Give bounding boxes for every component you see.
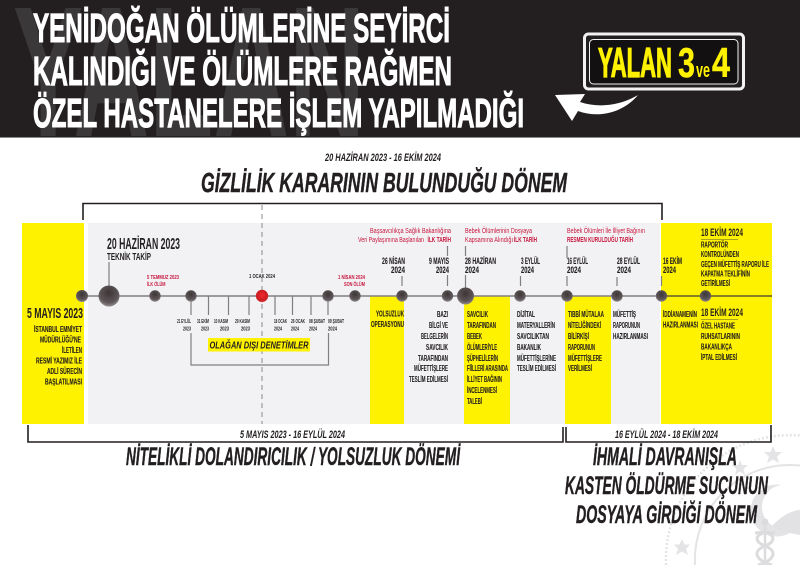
timeline dots (76, 286, 711, 306)
event: belgelerin teslimi: TARAFINDAN (418, 354, 448, 363)
date labels: 2024 (465, 265, 479, 275)
audit date labels: 2023 (183, 326, 191, 332)
red notes: first dates: Veri Paylaşımına Başlanılan (358, 237, 424, 244)
red notes: first dates: Başsavcılıkça Sağlık Bakanlığına (370, 228, 451, 235)
event: bilirkişi raporu: MÜFETTİŞLERE (568, 354, 602, 363)
red notes: first dates: Bebek Ölümlerinin Dosyaya (465, 227, 532, 235)
event: 18 ekim ruhsat iptali: ÖZEL HASTANE (701, 322, 735, 330)
event: teknik takip: TEKNİK TAKİP (107, 250, 151, 263)
date labels: 3 EYLÜL (521, 256, 540, 266)
event: iddianame: HAZIRLANMASI (663, 320, 698, 330)
audit date labels: 21 EYLÜL (177, 318, 191, 325)
date labels: 2024 (521, 265, 534, 275)
badge: yalan 3 ve 4: 3 (678, 39, 695, 86)
event: illiyet bağı talebi: FİİLLERİ ARASINDA (467, 364, 508, 373)
event: 5 mayıs 2023: İLETİLEN (62, 346, 82, 355)
main title: YENİDOĞAN ÖLÜMLERİNE SEYİRCİ (33, 5, 450, 51)
event: 5 mayıs 2023: MÜDÜRLÜĞÜ'NE (40, 336, 81, 344)
heading: fraud period (126, 428, 461, 471)
event: 5 mayıs 2023: RESMİ YAZIMIZ İLE (36, 356, 82, 366)
audit date labels: 2023 (220, 326, 229, 332)
event: iddianame: İDDİANAMENİN (663, 310, 697, 319)
event: bilirkişi raporu: NİTELİĞİNDEKİ (568, 321, 601, 330)
badge: yalan 3 ve 4: ve (696, 60, 710, 82)
secrecy period heading: 20 HAZİRAN 2023 - 16 EKİM 2024 (324, 151, 441, 164)
event: belgelerin teslimi: MÜFETTİŞLERE (414, 364, 448, 373)
event: bilirkişi raporu: VERİLMESİ (568, 364, 592, 373)
event: 18 ekim kapatma teklifi: GETİRİLMESİ (701, 279, 730, 288)
bracket: negligence period (566, 425, 771, 442)
event: 18 ekim ruhsat iptali: BAKANLIKÇA (701, 342, 732, 352)
audit date labels: 2024 (328, 326, 337, 332)
event: 18 ekim kapatma teklifi: KAPATMA TEKLİFİNİN (701, 270, 750, 278)
event: 18 ekim ruhsat iptali: RUHSATLARININ (701, 332, 740, 341)
audit date labels (177, 318, 345, 332)
event: illiyet bağı talebi: İNCELENMESİ (467, 386, 497, 395)
audit date labels: 29 KASIM (235, 319, 250, 325)
red notes: first dates: İLK TARİH (428, 236, 451, 244)
main title: KALINDIĞI VE ÖLÜMLERE RAĞMEN (33, 48, 452, 94)
event: dijital materyaller: BAKANLIK (517, 343, 541, 352)
audit date labels: 2024 (274, 326, 282, 332)
event: belgelerin teslimi: BAZI (437, 310, 448, 319)
date labels: 2024 (567, 265, 581, 275)
date labels: 16 EYLÜL (567, 256, 588, 266)
heading: negligence period: 16 EYLÜL 2024 - 18 EKİM 2024 (615, 428, 718, 441)
date labels: 26 NİSAN (382, 256, 405, 266)
event: 18 ekim ruhsat iptali: 18 EKİM 2024 (701, 306, 744, 319)
event: 18 ekim kapatma teklifi: KONTROLÜNDEN (701, 250, 739, 259)
date labels: 9 MAYIS (429, 256, 449, 266)
event: illiyet bağı talebi: İLLİYET BAĞININ (467, 375, 502, 384)
red notes: first dates: Kapsamına Alındığı (465, 237, 513, 244)
event: bilirkişi raporu: TIBBİ MÜTALAA (568, 310, 604, 319)
heading: negligence period (565, 428, 769, 529)
event: yolsuzluk operasyonu (371, 310, 404, 329)
date labels: 2024 (436, 265, 449, 275)
audit date labels: 10 KASIM (214, 319, 228, 325)
red notes: first dates (358, 226, 645, 244)
event: illiyet bağı talebi: TARAFINDAN (467, 321, 496, 330)
heading: fraud period: 5 MAYIS 2023 - 16 EYLÜL 2024 (240, 428, 345, 441)
event: 5 mayıs 2023 (27, 305, 83, 386)
callout: olağan dışı denetimler: OLAĞAN DIŞI DENETİMLER (210, 338, 309, 352)
audit date labels: 2024 (291, 326, 299, 332)
event: illiyet bağı talebi: ÖLÜMLERİYLE (467, 343, 497, 352)
audit date labels: 08 ŞUBAT (309, 319, 326, 325)
event: dijital materyaller (517, 310, 556, 373)
event: dijital materyaller: SAVCILIKTAN (517, 332, 549, 341)
event: illiyet bağı talebi: TALEBİ (467, 397, 482, 406)
event: yolsuzluk operasyonu: YOLSUZLUK (376, 310, 404, 318)
event: 5 mayıs 2023: ADLİ SÜRECİN (47, 367, 82, 376)
header band (0, 0, 800, 176)
event: müfettiş raporu: MÜFETTİŞ (613, 310, 636, 319)
bracket: secrecy period (83, 204, 662, 220)
event: bilirkişi raporu (568, 310, 604, 373)
event: 18 ekim ruhsat iptali: İPTAL EDİLMESİ (701, 353, 737, 362)
red notes: first dates: RESMEN KURULDUĞU TARİH (567, 235, 633, 244)
audit date labels: 2023 (201, 326, 209, 332)
emblem watermark (666, 435, 800, 565)
date labels: 28 EYLÜL (617, 256, 640, 266)
heading: fraud period: NİTELİKLİ DOLANDIRICILIK / YOLSUZLUK DÖNEMİ (126, 442, 461, 471)
panel backgrounds (22, 223, 772, 424)
event: dijital materyaller: DİJİTAL (517, 310, 535, 319)
event: illiyet bağı talebi: SAVCILIK (467, 310, 488, 319)
event: dijital materyaller: TESLİM EDİLMESİ (517, 364, 556, 373)
event: belgelerin teslimi: BELGELERİN (421, 332, 448, 341)
event: 5 mayıs 2023: BAŞLATILMASI (45, 378, 82, 386)
event: 5 mayıs 2023: İSTANBUL EMNİYET (34, 325, 82, 334)
event: first and last death, new year: İLK ÖLÜM (147, 281, 166, 288)
main title (33, 5, 524, 136)
event: bilirkişi raporu: RAPORUNUN (568, 343, 595, 352)
bracket: fraud period (28, 425, 563, 442)
event: illiyet bağı talebi (467, 310, 508, 406)
event: illiyet bağı talebi: ŞÜPHELİLERİN (467, 354, 498, 363)
event: belgelerin teslimi: SAVCILIK (426, 343, 448, 352)
date labels: 2024 (663, 265, 676, 275)
audit date labels: 09 ŞUBAT (328, 319, 345, 325)
date labels (382, 256, 682, 275)
event: müfettiş raporu (613, 310, 648, 341)
event: bilirkişi raporu: BİLİRKİŞİ (568, 332, 589, 341)
event: müfettiş raporu: RAPORUNUN (613, 321, 640, 330)
event: yolsuzluk operasyonu: OPERASYONU (371, 320, 404, 329)
secrecy period heading (201, 151, 567, 198)
event: dijital materyaller: MÜFETTİŞLERİNE (517, 354, 556, 363)
event: 5 mayıs 2023: 5 MAYIS 2023 (27, 305, 83, 322)
event: belgelerin teslimi: TESLİM EDİLMESİ (409, 375, 448, 384)
event: first and last death, new year: 5 TEMMUZ 2023 (147, 275, 180, 281)
date labels: 2024 (391, 265, 405, 275)
audit date labels: 18 OCAK (274, 319, 287, 325)
event: first and last death, new year (147, 274, 366, 288)
event: first and last death, new year: 1 OCAK 2024 (249, 274, 276, 280)
red notes: first dates: Bebek Ölümleri İle İlliyet Bağının (567, 226, 645, 235)
event: 18 ekim kapatma teklifi (701, 226, 769, 288)
audit date labels: 2024 (309, 326, 317, 332)
timeline axis and ticks (82, 246, 772, 365)
event: first and last death, new year: 1 NİSAN 2024 (338, 274, 366, 281)
event: dijital materyaller: MATERYALLERİN (517, 321, 555, 330)
event: iddianame (663, 310, 698, 330)
date labels: 16 EKİM (663, 256, 682, 266)
audit date labels: 31 EKİM (197, 318, 209, 325)
badge: yalan 3 ve 4: 4 (712, 39, 730, 86)
event: müfettiş raporu: HAZIRLANMASI (613, 332, 648, 341)
secrecy period heading: GİZLİLİK KARARININ BULUNDUĞU DÖNEM (201, 167, 567, 198)
event: belgelerin teslimi: BİLGİ VE (429, 321, 448, 330)
audit date labels: 26 OCAK (291, 319, 305, 325)
date labels: 2024 (617, 265, 631, 275)
red notes: first dates: İLK TARİH (514, 236, 537, 244)
event: 18 ekim kapatma teklifi: 18 EKİM 2024 (701, 226, 744, 239)
date labels: 28 HAZİRAN (465, 256, 496, 266)
event: illiyet bağı talebi: BEBEK (467, 332, 482, 341)
event: first and last death, new year: SON ÖLÜM (344, 281, 365, 288)
event: teknik takip: 20 HAZİRAN 2023 (107, 235, 180, 253)
event: belgelerin teslimi (409, 310, 448, 384)
audit date labels: 2023 (241, 326, 250, 332)
callout: olağan dışı denetimler (208, 338, 310, 352)
event: 18 ekim kapatma teklifi: RAPORTÖR (701, 240, 728, 250)
dashed year divider (261, 205, 263, 424)
arrow: pointing to title (555, 94, 638, 121)
event: 18 ekim ruhsat iptali (701, 306, 744, 362)
badge: yalan 3 ve 4: YALAN (598, 39, 672, 86)
event: teknik takip (107, 235, 180, 263)
